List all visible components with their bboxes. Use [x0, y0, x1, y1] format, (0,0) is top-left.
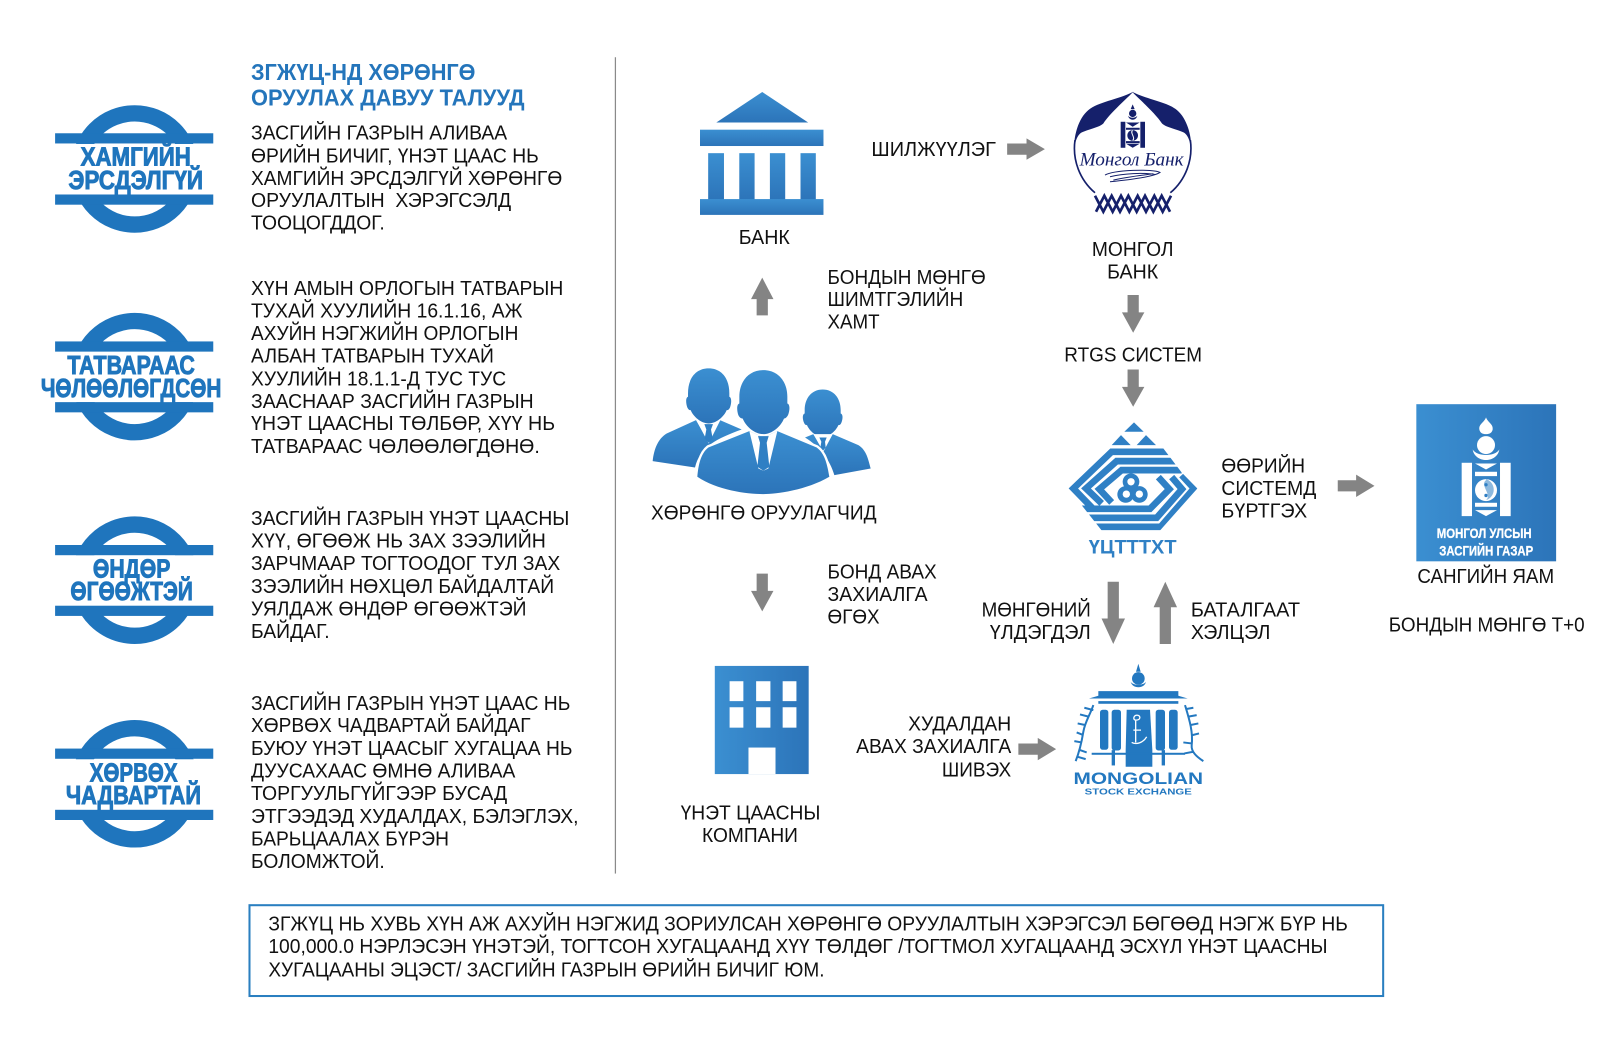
text block: tax exempt: [251, 278, 563, 458]
arrow: depository to exchange: [1102, 582, 1125, 644]
text block: liquid: ЭТГЭЭДЭД ХУДАЛДАХ, БЭЛЭГЛЭХ,: [251, 806, 579, 828]
logo: Mongolbank: Монгол Банк: [1079, 149, 1185, 170]
text block: tax exempt: АЛБАН ТАТВАРЫН ТУХАЙ: [251, 343, 494, 367]
text block: tax exempt: ТУХАЙ ХУУЛИЙН 16.1.16, АЖ: [251, 298, 523, 322]
text block: high yield: ЗАСГИЙН ГАЗРЫН ҮНЭТ ЦААСНЫ: [251, 506, 569, 530]
text block: safest: ОРУУЛАЛТЫН ХЭРЭГСЭЛД: [251, 190, 511, 212]
panel: government logo: МОНГОЛ УЛСЫН: [1437, 526, 1532, 542]
badge: high yield: ӨНДӨР: [93, 556, 170, 584]
heading: advantages: [251, 59, 524, 111]
icon: investors: [653, 368, 871, 494]
label: bond money with fee: БОНДЫН МӨНГӨ: [828, 267, 986, 289]
callout: definition box: ХУГАЦААНЫ ЭЦЭСТ/ ЗАСГИЙН ГАЗРЫН ӨРИЙН БИЧИГ ЮМ.: [268, 958, 824, 982]
text block: liquid: ЗАСГИЙН ГАЗРЫН ҮНЭТ ЦААС НЬ: [251, 691, 570, 715]
label: guaranteed trade: [1191, 599, 1300, 644]
label: guaranteed trade: БАТАЛГААТ: [1191, 599, 1300, 621]
badge: tax exempt: ТАТВАРААС: [67, 352, 195, 380]
label: register in own system: БҮРТГЭХ: [1221, 500, 1308, 522]
badge: safest: ЭРСДЭЛГҮЙ: [68, 165, 203, 195]
heading: advantages: ЗГЖҮЦ-НД ХӨРӨНГӨ: [251, 59, 476, 85]
arrow: depository to ministry: [1338, 475, 1374, 497]
callout: definition box: 100,000.0 НЭРЛЭСЭН ҮНЭТЭЙ, ТОГТСОН ХУГАЦААНД ХҮҮ ТӨЛДӨГ /ТОГТМОЛ ХУГАЦААНД ЭСХҮЛ ҮНЭТ ЦААСНЫ: [268, 934, 1328, 958]
label: RTGS: RTGS СИСТЕМ: [1064, 344, 1202, 366]
text block: tax exempt: ТАТВАРААС ЧӨЛӨӨЛӨГДӨНӨ.: [251, 436, 540, 458]
label: transfer: ШИЛЖҮҮЛЭГ: [871, 139, 996, 161]
text block: tax exempt: ЗААСНААР ЗАСГИЙН ГАЗРЫН: [251, 389, 534, 413]
text block: liquid: ТОРГУУЛЬГҮЙГЭЭР БУСАД: [251, 781, 507, 805]
badge: tax exempt: ЧӨЛӨӨЛӨГДСӨН: [41, 375, 221, 403]
label: bond money with fee: [828, 267, 986, 334]
text block: safest: ӨРИЙН БИЧИГ, ҮНЭТ ЦААС НЬ: [251, 143, 539, 167]
text block: liquid: БУЮУ ҮНЭТ ЦААСЫГ ХУГАЦАА НЬ: [251, 738, 572, 760]
label: register in own system: СИСТЕМД: [1221, 478, 1317, 500]
label: securities company: [681, 802, 820, 847]
text block: safest: [251, 120, 562, 235]
label: bond purchase order: БОНД АВАХ: [828, 562, 937, 584]
label: bond purchase order: ЗАХИАЛГА: [828, 584, 928, 606]
arrow: Mongolbank to RTGS: [1122, 295, 1144, 333]
text block: liquid: [251, 691, 579, 873]
badge: tax exempt: [41, 321, 221, 432]
text block: tax exempt: ХУУЛИЙН 18.1.1-Д ТУС ТУС: [251, 366, 506, 390]
arrow: bank to Mongolbank: [1007, 138, 1045, 160]
label: sell buy order: [856, 714, 1012, 782]
label: register in own system: ӨӨРИЙН: [1221, 454, 1305, 478]
arrow: exchange to depository: [1154, 582, 1177, 644]
callout: definition box: ЗГЖҮЦ НЬ ХУВЬ ХҮН АЖ АХУЙН НЭГЖИД ЗОРИУЛСАН ХӨРӨНГӨ ОРУУЛАЛТЫН ХЭРЭГСЭЛ БӨГӨӨД НЭГЖ БҮР НЬ: [268, 912, 1348, 936]
label: Mongolbank: [1092, 239, 1173, 284]
label: guaranteed trade: ХЭЛЦЭЛ: [1191, 622, 1270, 644]
badge: liquid: ЧАДВАРТАЙ: [66, 780, 201, 810]
text block: safest: ХАМГИЙН ЭРСДЭЛГҮЙ ХӨРӨНГӨ: [251, 166, 562, 190]
text block: tax exempt: АХУЙН НЭГЖИЙН ОРЛОГЫН: [251, 321, 518, 345]
label: depository name: ҮЦТТТХТ: [1089, 537, 1177, 559]
logo: securities depository: [1073, 422, 1194, 527]
arrow: investors to bank: [751, 278, 773, 315]
label: sell buy order: ХУДАЛДАН: [908, 714, 1011, 736]
label: ministry of finance: САНГИЙН ЯАМ: [1417, 564, 1554, 588]
label: cash balance: МӨНГӨНИЙ: [982, 597, 1091, 621]
text block: high yield: ЗАРЧМААР ТОГТООДОГ ТУЛ ЗАХ: [251, 553, 561, 575]
badge: safest: ХАМГИЙН: [81, 141, 191, 171]
callout: definition box: [249, 905, 1383, 996]
text block: liquid: ХӨРВӨХ ЧАДВАРТАЙ БАЙДАГ: [251, 713, 531, 737]
icon: bank: [700, 92, 823, 215]
label: cash balance: [982, 597, 1091, 644]
arrow: securities company to stock exchange: [1018, 738, 1056, 760]
text block: liquid: БОЛОМЖТОЙ.: [251, 849, 385, 873]
text block: high yield: ЗЭЭЛИЙН НӨХЦӨЛ БАЙДАЛТАЙ: [251, 574, 554, 598]
badge: liquid: [55, 728, 213, 839]
text block: high yield: [251, 506, 569, 643]
badge: safest: [55, 113, 213, 225]
label: bond money T+0: БОНДЫН МӨНГӨ Т+0: [1389, 615, 1585, 637]
text block: safest: ЗАСГИЙН ГАЗРЫН АЛИВАА: [251, 120, 508, 144]
logo: Mongolian Stock Exchange: [1073, 664, 1203, 796]
label: cash balance: ҮЛДЭГДЭЛ: [990, 622, 1091, 644]
label: bond money with fee: ХАМТ: [828, 312, 880, 334]
text block: tax exempt: ХҮН АМЫН ОРЛОГЫН ТАТВАРЫН: [251, 278, 563, 300]
panel: government logo: [1416, 404, 1556, 561]
label: bond purchase order: [828, 562, 937, 629]
label: bond purchase order: ӨГӨХ: [828, 607, 880, 629]
label: bank: БАНК: [739, 227, 790, 249]
label: bond money with fee: ШИМТГЭЛИЙН: [828, 287, 963, 311]
label: sell buy order: АВАХ ЗАХИАЛГА: [856, 736, 1012, 758]
text block: high yield: ХҮҮ, ӨГӨӨЖ НЬ ЗАХ ЗЭЭЛИЙН: [251, 529, 546, 553]
label: Mongolbank: МОНГОЛ: [1092, 239, 1173, 261]
badge: liquid: ХӨРВӨХ: [90, 760, 178, 788]
label: sell buy order: ШИВЭХ: [942, 760, 1012, 782]
badge: high yield: [55, 525, 213, 636]
label: securities company: ҮНЭТ ЦААСНЫ: [681, 802, 820, 824]
label: Mongolbank: БАНК: [1107, 262, 1158, 284]
text block: high yield: БАЙДАГ.: [251, 619, 330, 643]
text block: liquid: ДУУСАХААС ӨМНӨ АЛИВАА: [251, 761, 516, 783]
icon: securities company building: [715, 666, 809, 774]
text block: liquid: БАРЬЦААЛАХ БҮРЭН: [251, 829, 449, 851]
arrow: RTGS to securities depository: [1122, 369, 1144, 407]
badge: high yield: ӨГӨӨЖТЭЙ: [70, 576, 193, 606]
heading: advantages: ОРУУЛАХ ДАВУУ ТАЛУУД: [251, 85, 524, 111]
text block: safest: ТООЦОГДДОГ.: [251, 213, 385, 235]
panel: government logo: ЗАСГИЙН ГАЗАР: [1439, 542, 1534, 560]
logo: Mongolian Stock Exchange: MONGOLIAN: [1073, 770, 1203, 788]
label: investors: ХӨРӨНГӨ ОРУУЛАГЧИД: [651, 502, 877, 524]
text block: tax exempt: ҮНЭТ ЦААСНЫ ТӨЛБӨР, ХҮҮ НЬ: [251, 413, 555, 435]
text block: high yield: УЯЛДАЖ ӨНДӨР ӨГӨӨЖТЭЙ: [251, 596, 527, 620]
label: register in own system: [1221, 454, 1317, 522]
arrow: investors to securities company: [751, 574, 773, 611]
label: securities company: КОМПАНИ: [702, 825, 798, 847]
logo: Mongolbank: [1074, 92, 1191, 212]
logo: Mongolian Stock Exchange: STOCK EXCHANGE: [1085, 786, 1192, 796]
